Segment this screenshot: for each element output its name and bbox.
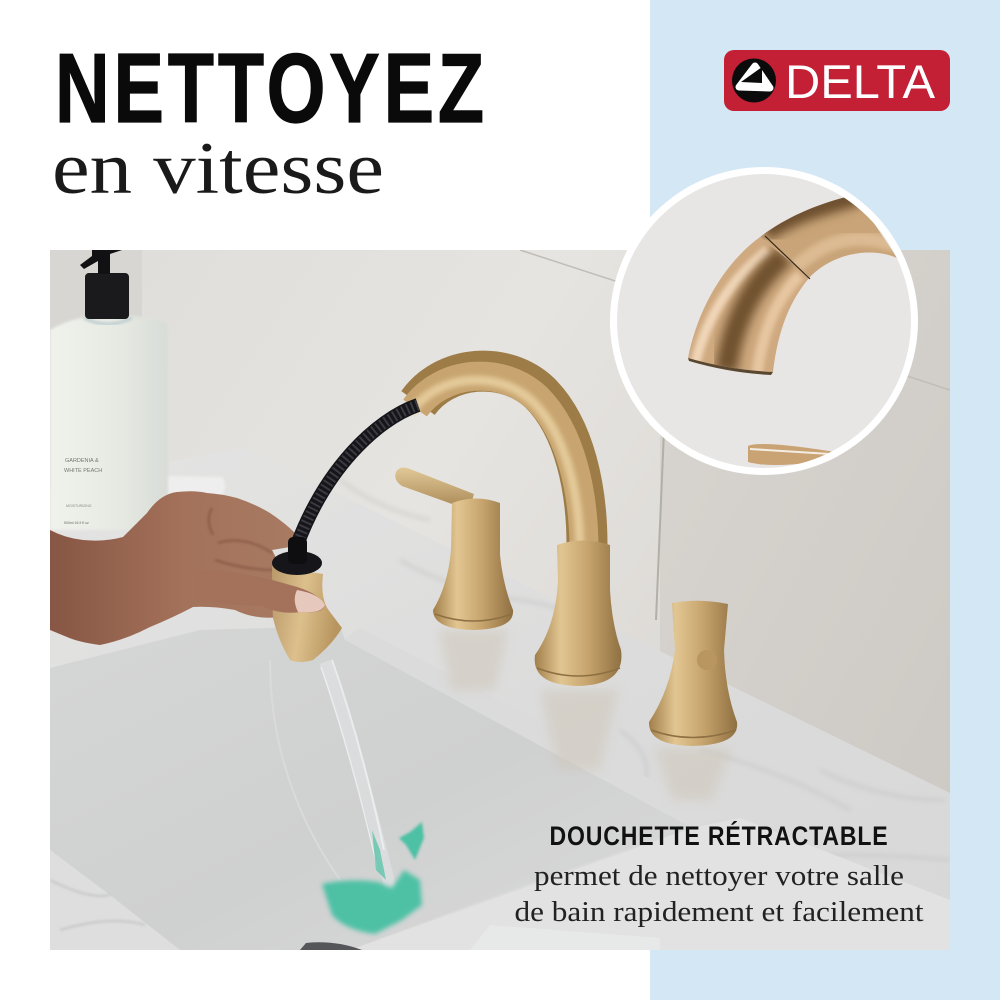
left handle: [395, 468, 513, 630]
caption: de bain rapidement et facilement: [514, 896, 924, 928]
marble countertop: [356, 651, 950, 948]
caption: [514, 820, 924, 928]
thumb over sprayer: [272, 580, 325, 613]
water stream: [321, 660, 392, 895]
faucet reflections on counter: [438, 630, 732, 800]
caption: DOUCHETTE RÉTRACTABLE: [550, 820, 888, 851]
icon: Delta triangle emblem: [732, 58, 776, 102]
spout arm: [760, 198, 897, 277]
printed card at bottom right: [470, 925, 660, 950]
sprayer head: [272, 537, 342, 662]
dark object at sink lower edge: [300, 942, 362, 950]
logo: Delta: DELTA: [785, 55, 936, 108]
title: NETTOYEZ: [55, 33, 488, 143]
inset: spout close-up: [610, 167, 920, 480]
soap bottle: [50, 250, 168, 530]
soap bottle: 500ml 16.9 fl oz: [64, 521, 89, 525]
right handle: [649, 601, 737, 746]
light blue background panel: [650, 0, 1000, 1000]
spout pull-down head: [688, 237, 810, 372]
soap bottle: WHITE PEACH: [64, 468, 102, 474]
wall: [50, 250, 660, 651]
hand: [50, 491, 295, 645]
tray behind bottle: [168, 476, 224, 494]
soap bottle: MOISTURIZING: [66, 504, 92, 508]
main spout: [411, 371, 621, 686]
title: en vitesse: [52, 128, 384, 210]
photo: faucet over marble sink: [50, 250, 950, 950]
sink basin: [50, 628, 618, 950]
teal dye in drain: [322, 822, 424, 934]
logo: Delta: [724, 50, 950, 111]
handle tip: [748, 444, 835, 465]
black hose: [297, 405, 418, 545]
countertop edge: [343, 628, 722, 828]
soap bottle: GARDENIA &: [65, 458, 99, 464]
caption: permet de nettoyer votre salle: [534, 860, 904, 892]
title: [52, 33, 488, 210]
